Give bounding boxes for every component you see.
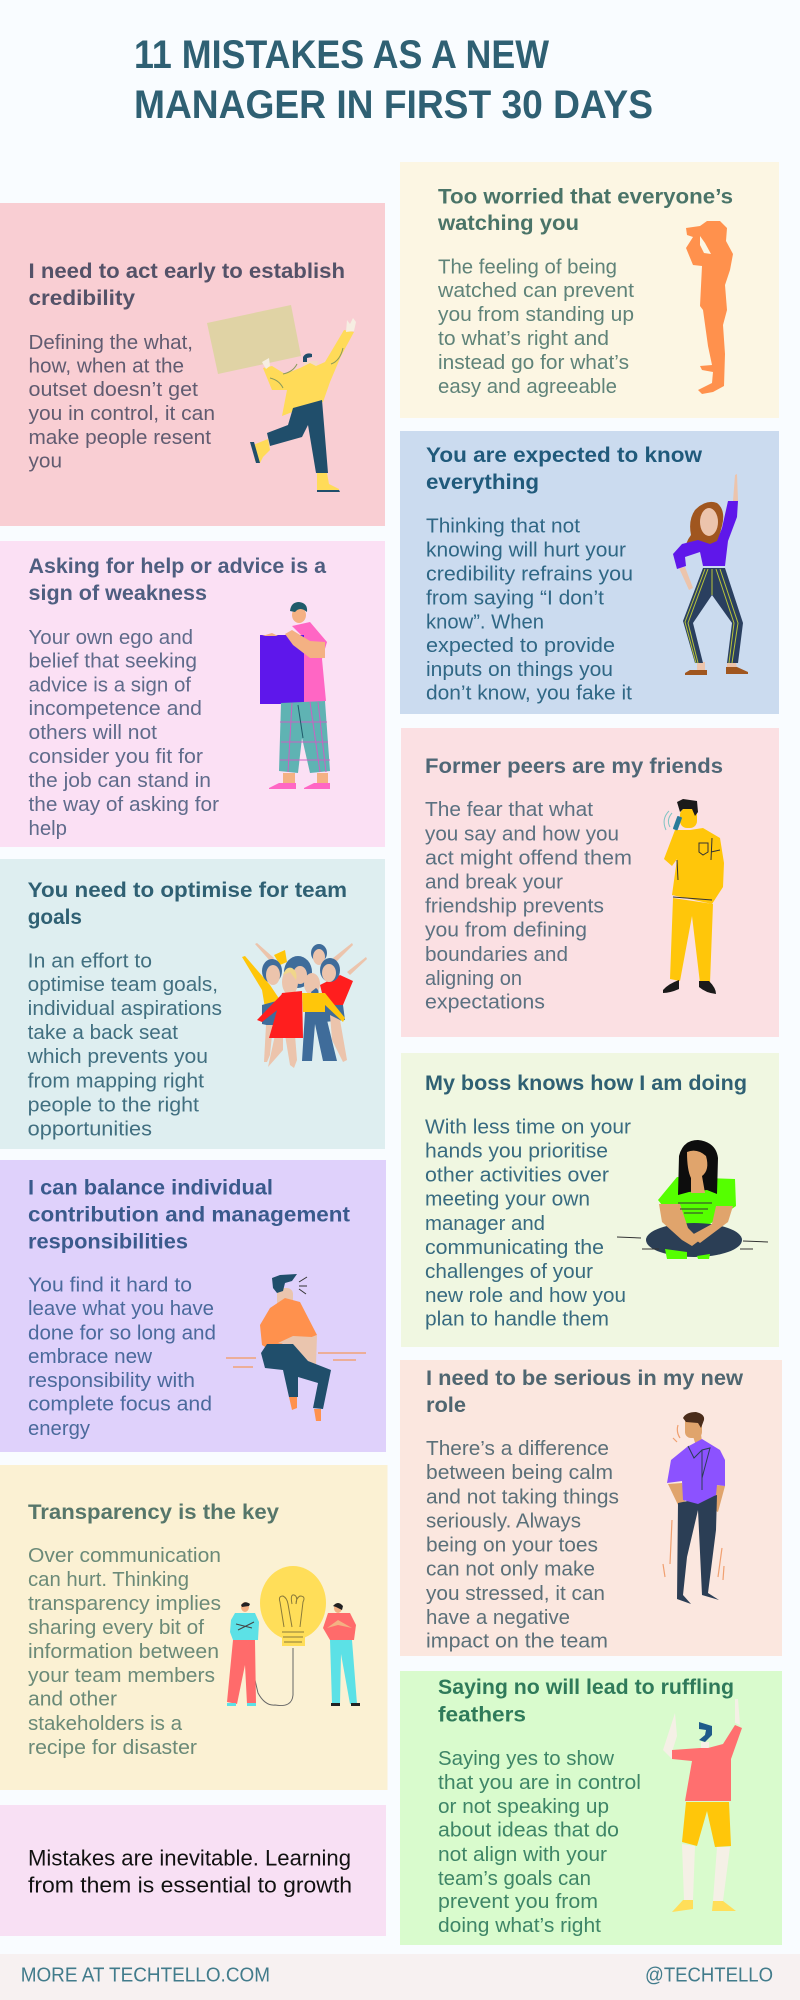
- body text: can hurt. Thinking: [28, 1569, 189, 1591]
- body text: easy and agreeable: [438, 376, 617, 398]
- heading: everything: [426, 471, 539, 494]
- heading: Asking for help or advice is a: [28, 555, 326, 578]
- icon: woman raising her hand: [673, 474, 748, 675]
- body text: [438, 1748, 641, 1937]
- heading: Transparency is the key: [28, 1501, 279, 1524]
- body text: There’s a difference: [426, 1438, 609, 1460]
- body text: from mapping right: [28, 1070, 204, 1092]
- body text: challenges of your: [425, 1261, 593, 1283]
- body text: [437, 257, 634, 398]
- body text: transparency implies: [28, 1593, 221, 1615]
- body text: and break your: [425, 872, 563, 894]
- body text: watched can prevent: [437, 280, 634, 302]
- body text: incompetence and: [28, 698, 202, 720]
- body text: can not only make: [426, 1559, 595, 1581]
- icon: man on the phone in yellow: [663, 799, 724, 994]
- title: [134, 33, 653, 127]
- body text: credibility refrains you: [426, 564, 633, 586]
- heading: role: [426, 1394, 466, 1417]
- closing text: from them is essential to growth: [28, 1872, 352, 1898]
- body text: [28, 332, 215, 473]
- heading: I need to act early to establish: [28, 260, 345, 283]
- heading: Too worried that everyone’s: [438, 186, 733, 208]
- body text: new role and how you: [425, 1285, 626, 1307]
- panel: act early to establish credibility: [0, 203, 385, 526]
- panel: balance individual contribution and management: [0, 1160, 386, 1452]
- body text: doing what’s right: [438, 1915, 601, 1937]
- body text: opportunities: [28, 1119, 152, 1141]
- body text: Saying yes to show: [438, 1748, 615, 1770]
- body text: how, when at the: [28, 356, 184, 378]
- icon: silhouette with binoculars: [686, 221, 733, 394]
- icon: man holding up a blank board: [207, 305, 356, 492]
- heading: My boss knows how I am doing: [425, 1072, 747, 1095]
- body text: you: [28, 451, 62, 473]
- body text: others will not: [28, 722, 157, 744]
- body text: [426, 1438, 619, 1652]
- body text: meeting your own: [425, 1189, 590, 1211]
- body text: to what’s right and: [438, 328, 609, 350]
- body text: impact on the team: [426, 1630, 608, 1652]
- body text: complete focus and: [28, 1394, 212, 1416]
- body text: aligning on: [425, 968, 522, 990]
- body text: recipe for disaster: [28, 1737, 197, 1759]
- body text: which prevents you: [27, 1046, 208, 1068]
- icon: man with raised arms seen from behind: [663, 1699, 742, 1912]
- body text: The fear that what: [425, 799, 593, 821]
- heading: I need to be serious in my new: [426, 1367, 744, 1390]
- icon: two people beside a giant light bulb: [227, 1566, 360, 1706]
- body text: you say and how you: [425, 823, 619, 845]
- body text: knowing will hurt your: [426, 540, 626, 562]
- heading: [426, 1367, 744, 1417]
- title: MANAGER IN FIRST 30 DAYS: [134, 83, 653, 127]
- body text: or not speaking up: [438, 1796, 609, 1818]
- icon: cheering group of people: [242, 943, 367, 1068]
- body text: about ideas that do: [438, 1820, 619, 1842]
- body text: embrace new: [28, 1346, 153, 1368]
- heading: [28, 1176, 350, 1254]
- body text: [425, 1116, 631, 1331]
- body text: communicating the: [425, 1237, 604, 1259]
- body text: [425, 799, 632, 1014]
- body text: In an effort to: [28, 950, 152, 972]
- body text: make people resent: [28, 427, 211, 449]
- body text: outset doesn’t get: [28, 379, 198, 401]
- heading: Former peers are my friends: [425, 755, 723, 778]
- panel: saying no will lead to ruffling feathers: [400, 1671, 782, 1945]
- body text: that you are in control: [438, 1772, 641, 1794]
- closing text: Mistakes are inevitable. Learning: [28, 1846, 351, 1870]
- heading: responsibilities: [28, 1231, 188, 1254]
- body text: you stressed, it can: [426, 1583, 605, 1605]
- panel: need to be serious in my new role: [400, 1360, 782, 1656]
- body text: team’s goals can: [438, 1868, 591, 1890]
- body text: know”. When: [426, 612, 544, 634]
- body text: you from defining: [425, 920, 587, 942]
- body text: from saying “I don’t: [426, 588, 604, 610]
- footer link: website: MORE AT TECHTELLO.COM: [21, 1964, 270, 1986]
- body text: Over communication: [28, 1545, 221, 1567]
- heading: You are expected to know: [426, 444, 703, 467]
- panel: expected to know everything: [400, 431, 779, 714]
- body text: being on your toes: [426, 1535, 598, 1557]
- body text: instead go for what’s: [438, 352, 629, 374]
- body text: you from standing up: [438, 304, 634, 326]
- heading: You need to optimise for team: [28, 879, 347, 902]
- icon: man sitting and shouting: [226, 1274, 366, 1421]
- body text: help: [28, 818, 67, 840]
- heading: goals: [28, 906, 82, 929]
- body text: inputs on things you: [426, 659, 613, 681]
- body text: Your own ego and: [28, 627, 193, 649]
- body text: individual aspirations: [28, 998, 222, 1020]
- panel: asking for help: [0, 541, 385, 847]
- heading: feathers: [438, 1703, 526, 1726]
- panel: former peers are my friends: [401, 728, 779, 1037]
- closing text: [28, 1846, 352, 1898]
- body text: Defining the what,: [28, 332, 193, 354]
- body text: belief that seeking: [28, 650, 197, 672]
- body text: consider you fit for: [28, 746, 203, 768]
- body text: and other: [28, 1689, 117, 1711]
- body text: seriously. Always: [426, 1511, 581, 1533]
- heading: [28, 879, 347, 929]
- body text: done for so long and: [28, 1323, 216, 1345]
- body text: manager and: [425, 1213, 545, 1235]
- body text: your team members: [28, 1665, 215, 1687]
- body text: stakeholders is a: [28, 1713, 183, 1735]
- body text: sharing every bit of: [28, 1617, 204, 1639]
- body text: and not taking things: [426, 1486, 619, 1508]
- heading: [438, 1676, 734, 1726]
- heading: I can balance individual: [28, 1176, 273, 1199]
- body text: [28, 1274, 216, 1440]
- body text: take a back seat: [28, 1022, 178, 1044]
- body text: prevent you from: [438, 1891, 598, 1913]
- body text: the job can stand in: [28, 770, 211, 792]
- body text: the way of asking for: [28, 794, 219, 816]
- heading: sign of weakness: [28, 582, 207, 605]
- body text: [27, 950, 222, 1141]
- body text: [28, 627, 219, 840]
- body text: not align with your: [438, 1844, 607, 1866]
- heading: contribution and management: [28, 1204, 350, 1226]
- body text: you in control, it can: [28, 403, 215, 425]
- body text: Thinking that not: [426, 516, 580, 538]
- body text: responsibility with: [28, 1370, 195, 1392]
- body text: boundaries and: [425, 944, 568, 966]
- body text: people to the right: [28, 1095, 199, 1117]
- heading: [437, 186, 733, 235]
- body text: The feeling of being: [438, 257, 617, 279]
- footer link: handle: @TECHTELLO: [645, 1964, 773, 1986]
- body text: don’t know, you fake it: [426, 682, 632, 704]
- body text: optimise team goals,: [28, 974, 218, 996]
- body text: [28, 1545, 221, 1759]
- body text: information between: [28, 1641, 219, 1663]
- body text: friendship prevents: [425, 896, 604, 918]
- title: 11 MISTAKES AS A NEW: [134, 33, 549, 77]
- body text: have a negative: [426, 1607, 570, 1629]
- body text: expectations: [425, 992, 545, 1014]
- panel: transparency is the key: [0, 1465, 388, 1790]
- body text: advice is a sign of: [28, 675, 191, 697]
- icon: man holding a purple board: [260, 602, 330, 789]
- heading: [28, 260, 345, 310]
- heading: Saying no will lead to ruffling: [438, 1676, 734, 1699]
- icon: woman sitting cross-legged: [617, 1140, 768, 1259]
- body text: expected to provide: [426, 635, 615, 657]
- body text: You find it hard to: [28, 1274, 192, 1296]
- heading: [426, 444, 703, 494]
- body text: leave what you have: [28, 1298, 214, 1320]
- body text: With less time on your: [425, 1116, 631, 1138]
- footer bar: [0, 1954, 800, 2000]
- heading: credibility: [28, 287, 135, 310]
- body text: plan to handle them: [425, 1309, 609, 1331]
- heading: watching you: [437, 212, 579, 235]
- body text: hands you prioritise: [425, 1141, 608, 1163]
- body text: act might offend them: [425, 848, 632, 870]
- icon: tense man in purple shirt: [663, 1412, 725, 1604]
- panel: worried everyone's watching: [400, 162, 779, 418]
- panel: closing message: [0, 1805, 386, 1936]
- body text: other activities over: [425, 1165, 609, 1187]
- panel: optimise for team goals: [0, 859, 385, 1149]
- heading: [28, 555, 326, 605]
- body text: energy: [28, 1418, 90, 1440]
- body text: between being calm: [426, 1462, 613, 1484]
- panel: my boss knows how I am doing: [401, 1053, 779, 1347]
- body text: [426, 516, 633, 704]
